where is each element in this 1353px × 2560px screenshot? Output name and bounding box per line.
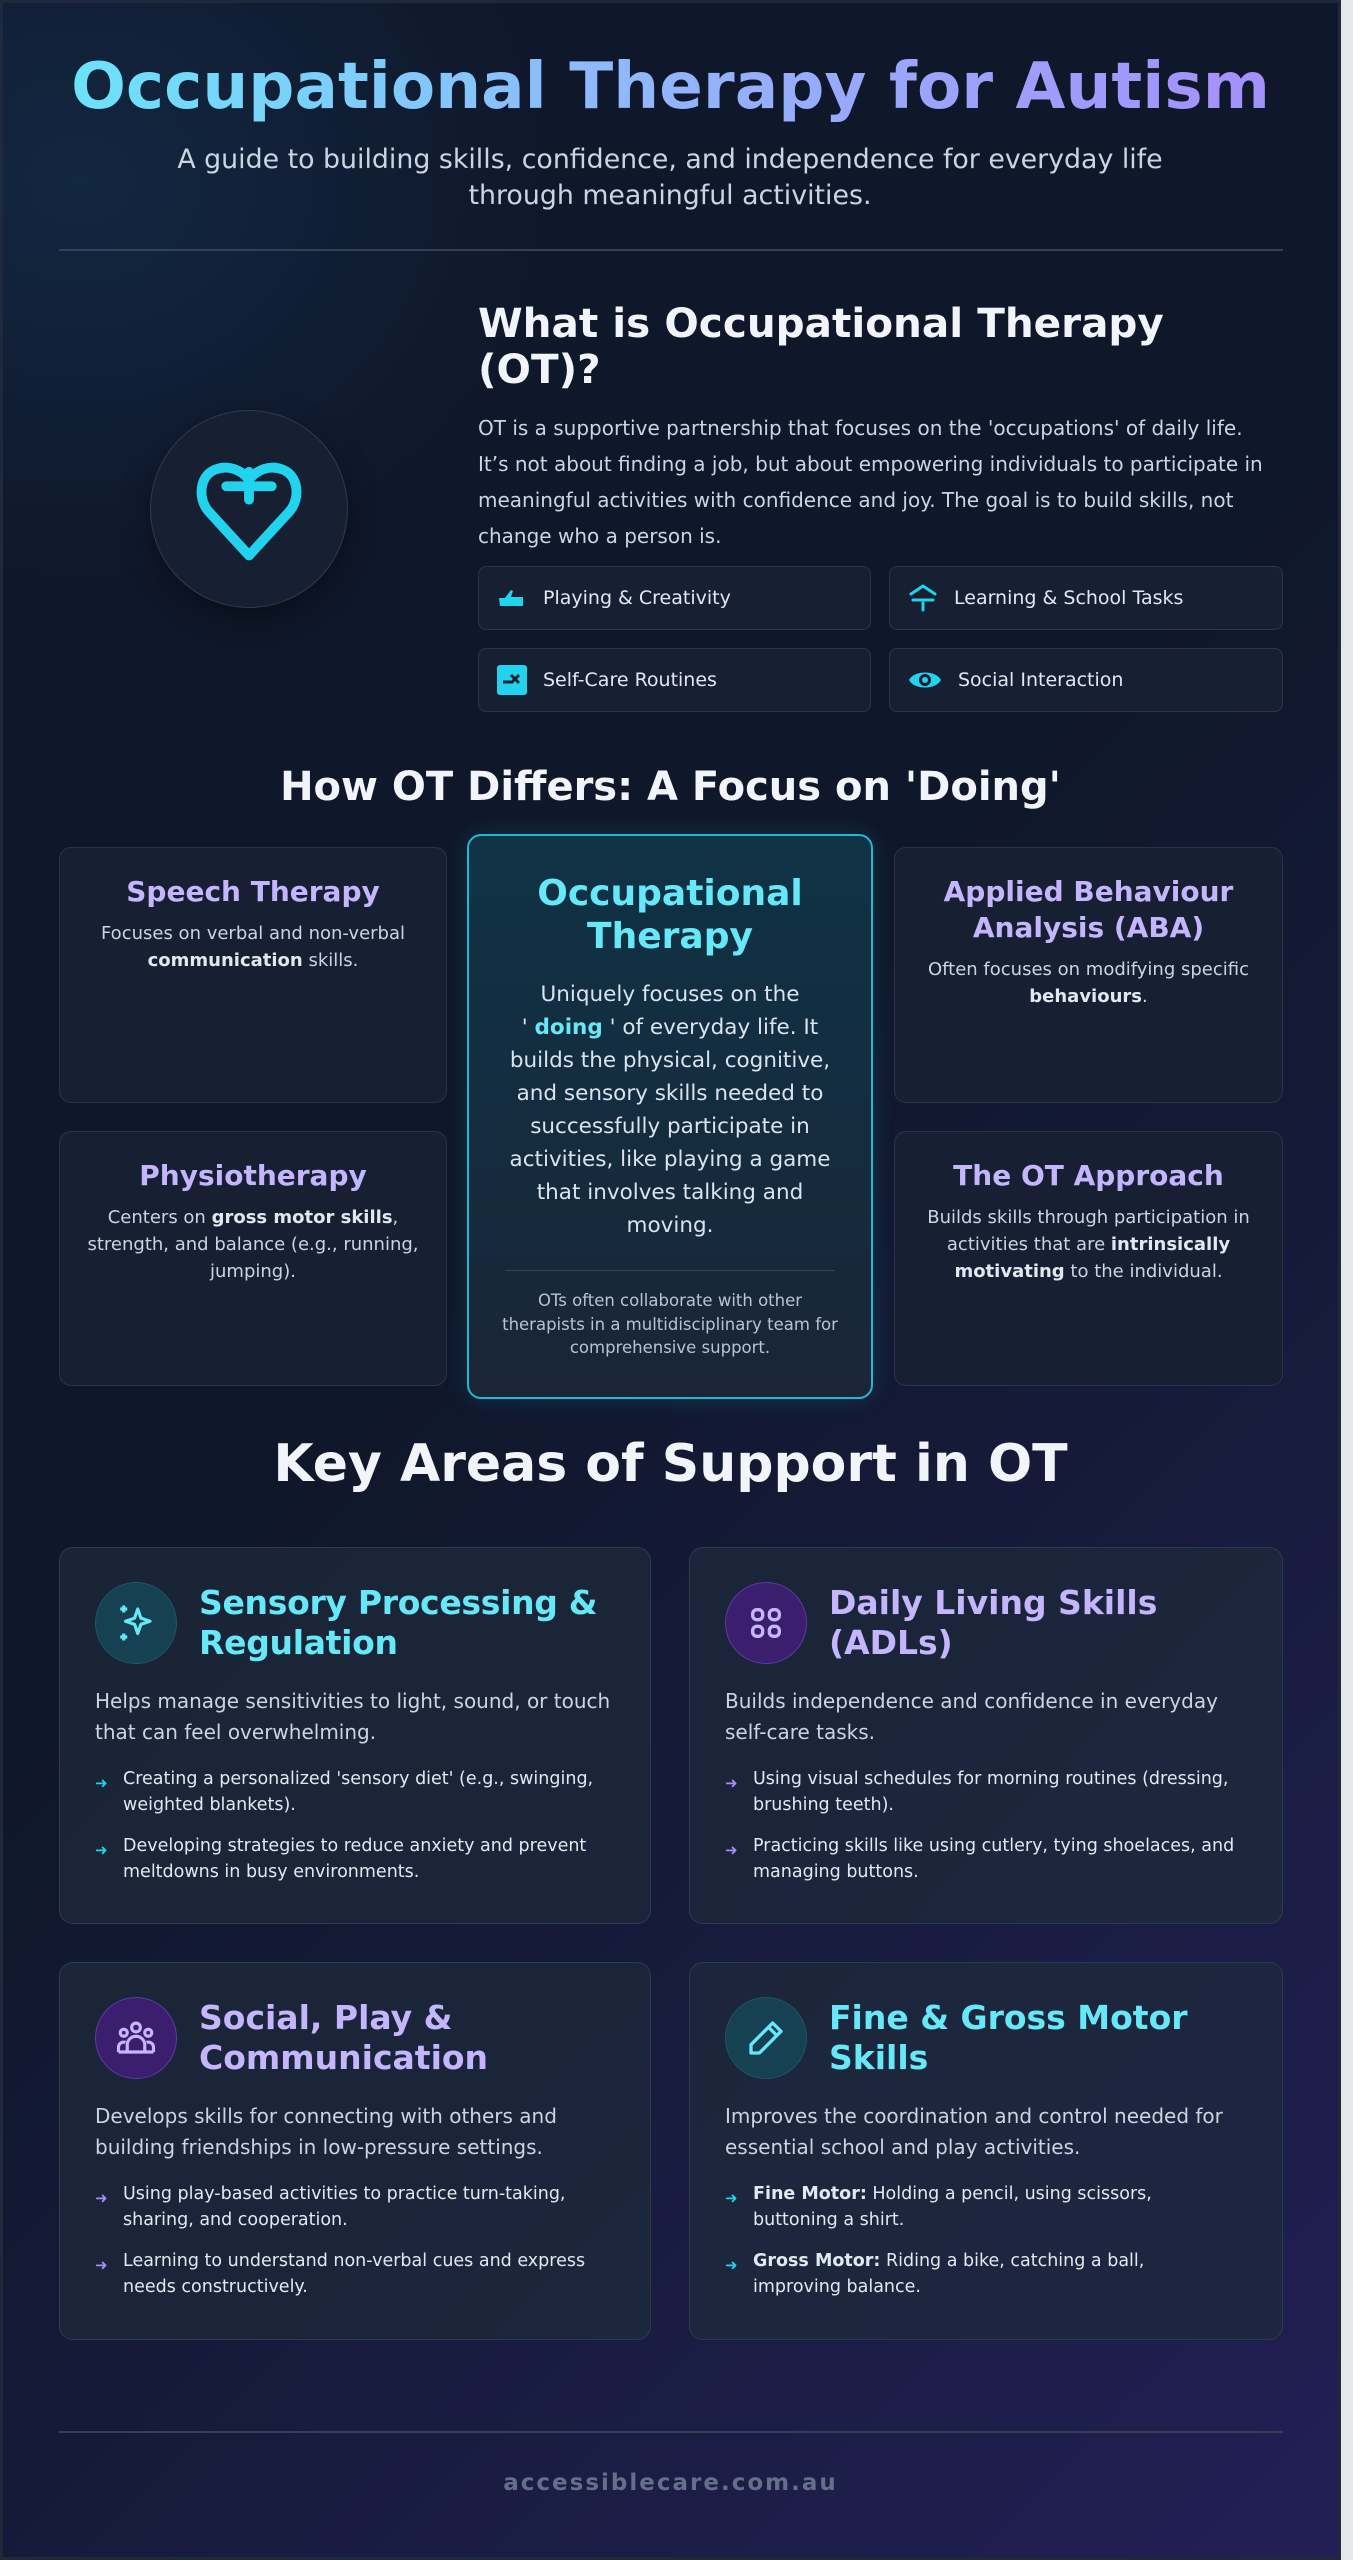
panel: ABA: Often focuses on modifying specific behaviours. xyxy=(928,959,1249,1007)
panel: physiotherapy: Physiotherapy xyxy=(139,1159,367,1192)
footer: website: accessiblecare.com.au xyxy=(503,2470,838,2496)
panel: ABA: Applied Behaviour Analysis (ABA) xyxy=(944,875,1233,944)
icon: heart circle xyxy=(150,410,348,608)
chip: playing xyxy=(478,566,871,630)
card: daily living: Using visual schedules for morning routines (dressing, brushing teeth). xyxy=(753,1769,1228,1815)
card: motor: Fine Motor: Holding a pencil, using scissors, buttoning a shirt. xyxy=(753,2184,1152,2230)
panel: physiotherapy xyxy=(59,1131,447,1386)
panel: physiotherapy: Centers on gross motor skills, strength, and balance (e.g., running, jumping). xyxy=(87,1207,419,1282)
panel: speech therapy xyxy=(59,847,447,1103)
card: sensory: Sensory Processing & Regulation xyxy=(199,1583,597,1662)
icon: sparkle xyxy=(95,1582,177,1664)
card: sensory: Helps manage sensitivities to light, sound, or touch that can feel overwhelming. xyxy=(95,1689,610,1744)
panel: occupational therapy xyxy=(467,834,873,1399)
card: social: Social, Play & Communication xyxy=(199,1998,488,2077)
panel: OT approach: The OT Approach xyxy=(953,1159,1224,1192)
icon: grid xyxy=(725,1582,807,1664)
panel: OT approach xyxy=(894,1131,1283,1386)
card: sensory: Developing strategies to reduce anxiety and prevent meltdowns in busy environments. xyxy=(123,1836,586,1882)
card: motor: Fine & Gross Motor Skills xyxy=(829,1998,1188,2077)
panel: occupational therapy: OTs often collaborate with other therapists in a multidisciplinary team for comprehensive support. xyxy=(502,1291,838,1357)
chip: self-care xyxy=(478,648,871,712)
card: daily living: Builds independence and confidence in everyday self-care tasks. xyxy=(725,1689,1218,1744)
panel: speech therapy: Focuses on verbal and non-verbal communication skills. xyxy=(101,923,405,971)
card: social: Learning to understand non-verbal cues and express needs constructively. xyxy=(123,2251,585,2297)
card: social: Using play-based activities to practice turn-taking, sharing, and cooperation. xyxy=(123,2184,566,2230)
panel: OT approach: Builds skills through participation in activities that are intrinsically motivating to the individual. xyxy=(927,1207,1250,1282)
chip: learning: Learning & School Tasks xyxy=(954,587,1183,609)
card: daily living: Daily Living Skills (ADLs) xyxy=(829,1583,1157,1662)
panel: speech therapy: Speech Therapy xyxy=(126,875,380,908)
card: social: Develops skills for connecting with others and building friendships in low-pressure settings. xyxy=(95,2104,557,2159)
text: OT description: It’s not about finding a job, but about empowering individuals to participate in meaningful activities with confidence and joy. The goal is to build skills, not change who a person is. xyxy=(478,452,1263,548)
panel: occupational therapy: Uniquely focuses on the xyxy=(541,982,799,1007)
chip: playing: Playing & Creativity xyxy=(543,587,731,609)
text: OT description: OT is a supportive partnership that focuses on the 'occupations' of daily life. xyxy=(478,416,1243,440)
card: sensory: Creating a personalized 'sensory diet' (e.g., swinging, weighted blankets). xyxy=(123,1769,593,1815)
icon: pencil xyxy=(725,1997,807,2079)
card: motor: Gross Motor: Riding a bike, catching a ball, improving balance. xyxy=(753,2251,1144,2297)
chip: social: Social Interaction xyxy=(958,669,1123,691)
panel: ABA xyxy=(894,847,1283,1103)
card: motor xyxy=(689,1962,1283,2340)
icon: people xyxy=(95,1997,177,2079)
chip: self-care: Self-Care Routines xyxy=(543,669,717,691)
title: Occupational Therapy for Autism xyxy=(71,49,1270,124)
heading: how OT differs: How OT Differs: A Focus on 'Doing' xyxy=(280,764,1061,810)
card: motor: Improves the coordination and control needed for essential school and play activities. xyxy=(725,2104,1223,2159)
subtitle: A guide to building skills, confidence, and independence for everyday life through meaningful activities. xyxy=(177,144,1163,211)
card: daily living: Practicing skills like using cutlery, tying shoelaces, and managing buttons. xyxy=(753,1836,1234,1882)
card: sensory xyxy=(59,1547,651,1924)
card: social xyxy=(59,1962,651,2340)
heading: key areas: Key Areas of Support in OT xyxy=(273,1434,1068,1494)
heading: what is OT: What is Occupational Therapy (OT)? xyxy=(478,299,1164,393)
chip: social xyxy=(889,648,1283,712)
card: daily living xyxy=(689,1547,1283,1924)
panel: occupational therapy: Occupational Therapy xyxy=(537,873,803,957)
panel: occupational therapy: ' doing ' of everyday life. It builds the physical, cognitive, and sensory skills needed to successfully participate in activities, like playing a game that involves talking and moving. xyxy=(510,1015,830,1238)
chip: learning xyxy=(889,566,1283,630)
